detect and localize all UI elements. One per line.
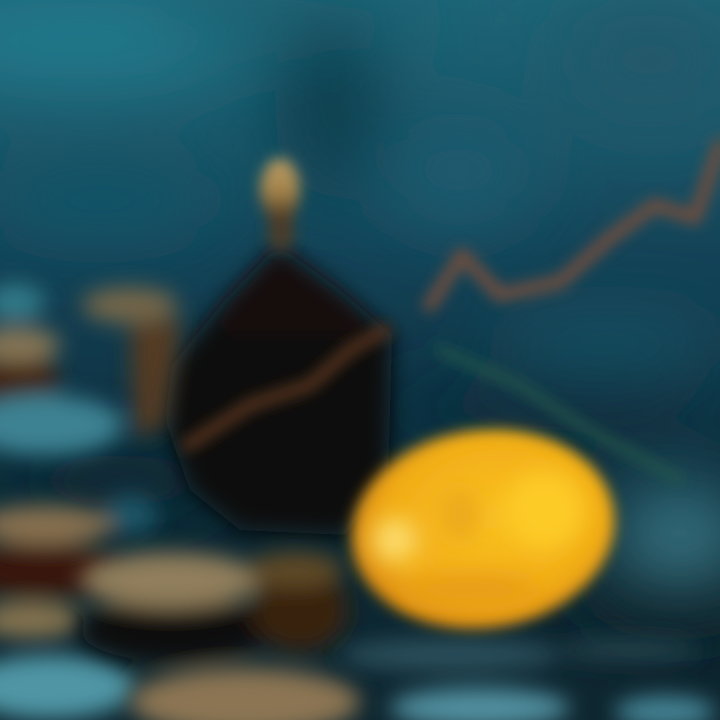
coins: bottom right teal bbox=[340, 638, 715, 720]
house: trend line bbox=[188, 330, 385, 445]
icon: house silhouette bbox=[165, 245, 392, 535]
chart: growth line bbox=[430, 145, 720, 480]
coin stack: centre bottom bbox=[80, 552, 360, 720]
icon: finial on roof bbox=[260, 158, 300, 250]
icon: gold coin bbox=[339, 413, 627, 645]
coin: highlights bbox=[373, 470, 585, 606]
coin stack: left bbox=[0, 284, 182, 719]
